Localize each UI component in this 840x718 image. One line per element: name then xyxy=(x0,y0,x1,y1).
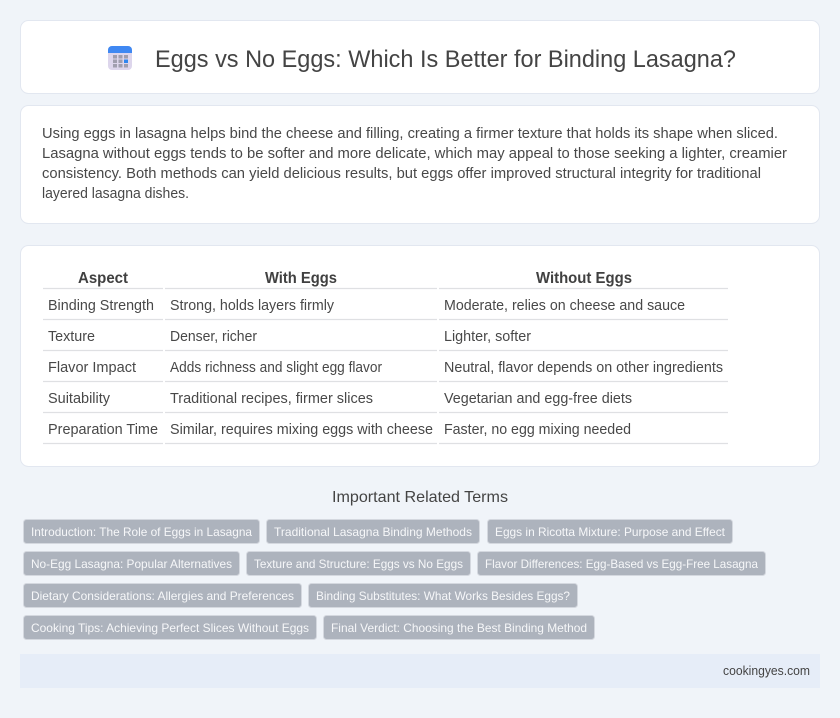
footer xyxy=(20,654,820,688)
row: binding strength: Strong, holds layers firmly xyxy=(170,297,334,314)
panel: comparison table xyxy=(20,246,820,466)
related terms tags xyxy=(24,520,766,640)
row: preparation time: Preparation Time xyxy=(48,421,158,438)
row: preparation time: Faster, no egg mixing needed xyxy=(444,421,631,438)
tag: Introduction: The Role of Eggs in Lasagna xyxy=(31,525,252,539)
tag xyxy=(24,616,316,640)
tag: Texture and Structure: Eggs vs No Eggs xyxy=(254,557,463,571)
tag xyxy=(24,552,240,576)
row: texture: Texture xyxy=(48,328,95,345)
row: texture xyxy=(48,328,531,345)
tag xyxy=(24,584,302,608)
tag: Binding Substitutes: What Works Besides Eggs? xyxy=(316,589,570,603)
tag: Flavor Differences: Egg-Based vs Egg-Free Lasagna xyxy=(485,557,758,571)
intro text: Lasagna without eggs tends to be softer and more delicate, which may appeal to those seeking a lighter, creamier xyxy=(42,145,787,162)
tag: Cooking Tips: Achieving Perfect Slices Without Eggs xyxy=(31,621,309,635)
tag xyxy=(478,552,766,576)
row: flavor impact: Flavor Impact xyxy=(48,359,137,376)
table header xyxy=(78,270,632,287)
table header: With Eggs xyxy=(265,270,337,287)
tag xyxy=(324,616,594,640)
heading: related terms: Important Related Terms xyxy=(332,489,508,506)
row: preparation time xyxy=(48,421,631,438)
intro text xyxy=(42,125,787,202)
intro text: layered lasagna dishes. xyxy=(42,185,189,202)
intro text: consistency. Both methods can yield delicious results, but eggs offer improved structural integrity for traditional xyxy=(42,165,761,182)
tag xyxy=(266,520,480,544)
intro text: Using eggs in lasagna helps bind the cheese and filling, creating a firmer texture that holds its shape when sliced. xyxy=(42,125,778,142)
row: texture: Denser, richer xyxy=(170,328,257,345)
tag xyxy=(24,520,260,544)
tag: Traditional Lasagna Binding Methods xyxy=(274,525,472,539)
tag: Eggs in Ricotta Mixture: Purpose and Effect xyxy=(495,525,726,539)
row: texture: Lighter, softer xyxy=(444,328,531,345)
tag xyxy=(488,520,732,544)
row: binding strength: Binding Strength xyxy=(48,297,154,314)
row: suitability xyxy=(48,390,632,407)
title: Eggs vs No Eggs: Which Is Better for Binding Lasagna? xyxy=(155,46,736,73)
tag xyxy=(246,552,470,576)
row: preparation time: Similar, requires mixing eggs with cheese xyxy=(170,421,433,438)
tag: Final Verdict: Choosing the Best Binding Method xyxy=(331,621,587,635)
row: binding strength: Moderate, relies on cheese and sauce xyxy=(444,297,685,314)
row: binding strength xyxy=(48,297,685,314)
tag: No-Egg Lasagna: Popular Alternatives xyxy=(31,557,232,571)
row: flavor impact xyxy=(48,359,723,376)
row: suitability: Vegetarian and egg-free diets xyxy=(444,390,632,407)
tag: Dietary Considerations: Allergies and Preferences xyxy=(31,589,294,603)
footer source: cookingyes.com xyxy=(723,664,810,678)
row: flavor impact: Adds richness and slight egg flavor xyxy=(170,359,382,376)
header panel xyxy=(20,20,820,94)
tag xyxy=(308,584,578,608)
row: suitability: Traditional recipes, firmer slices xyxy=(170,390,373,407)
panel: introduction xyxy=(20,106,820,224)
row: suitability: Suitability xyxy=(48,390,110,407)
icon: calendar xyxy=(108,46,132,70)
row: flavor impact: Neutral, flavor depends on other ingredients xyxy=(444,359,723,376)
table header: Aspect xyxy=(78,270,129,287)
table header: Without Eggs xyxy=(536,270,632,287)
